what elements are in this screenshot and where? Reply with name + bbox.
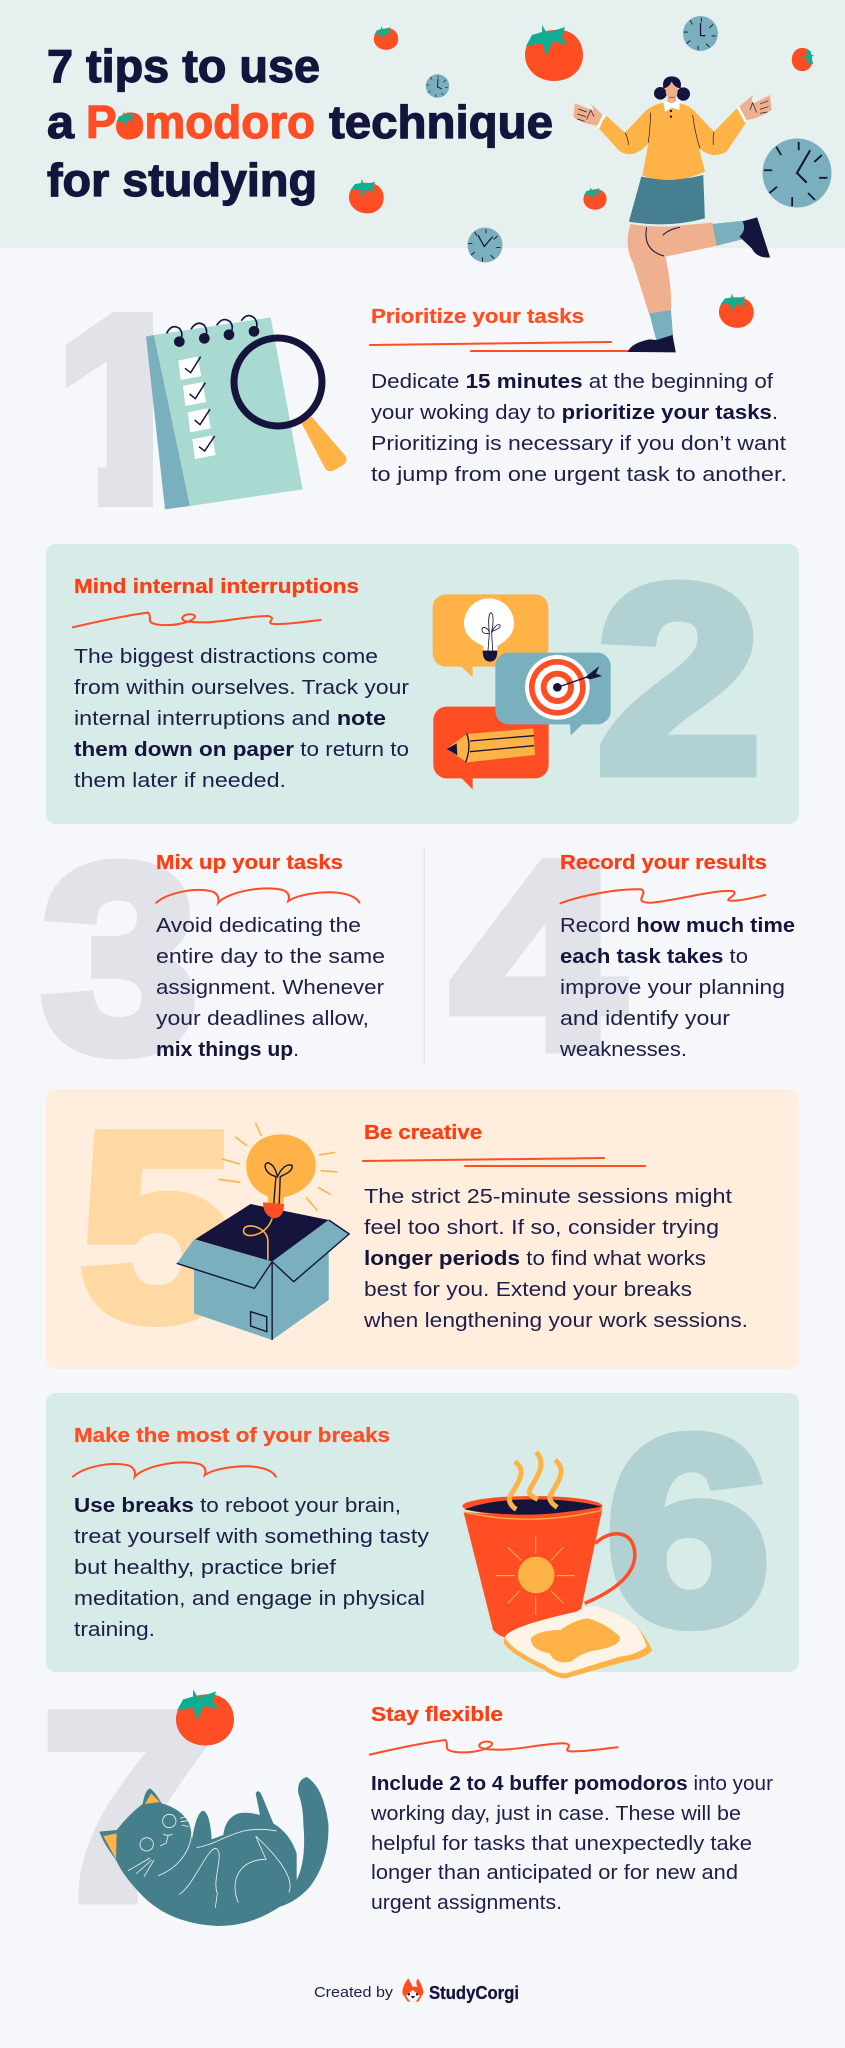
tip 3 text: Avoid dedicating the xyxy=(156,914,361,937)
tip 1 underline xyxy=(370,342,630,351)
tip 6 scribble xyxy=(73,1462,276,1477)
tip 2 heading: Mind internal interruptions xyxy=(74,576,359,598)
icon: clock large xyxy=(762,138,832,208)
tip 4 text: improve your planning xyxy=(560,976,785,999)
tip 2 text: from within ourselves. Track your xyxy=(74,676,409,699)
icon: cat xyxy=(99,1777,328,1926)
icon: mug and toast xyxy=(462,1452,652,1678)
icon: speech bubbles xyxy=(433,594,611,789)
panel: tip 2 xyxy=(46,532,799,828)
tip 6 text: training. xyxy=(74,1618,155,1641)
tip 7 heading: Stay flexible xyxy=(371,1704,503,1726)
tip 3 heading: Mix up your tasks xyxy=(156,852,343,874)
panel: tip 5 xyxy=(46,1079,799,1375)
tip 7 text: helpful for tasks that unexpectedly take xyxy=(371,1832,752,1855)
divider xyxy=(424,847,425,1066)
tip 5 text xyxy=(363,1185,748,1332)
tip 2 text: them down on paper to return to xyxy=(74,738,409,761)
icon: clock top right xyxy=(683,16,718,51)
tip 5 text: when lengthening your work sessions. xyxy=(363,1309,748,1332)
tip 2 text: them later if needed. xyxy=(74,769,286,792)
icon: clock lower xyxy=(468,228,502,262)
icon: notepad with magnifier xyxy=(146,316,347,509)
tip 4 text: and identify your xyxy=(560,1007,730,1030)
header band xyxy=(0,0,845,248)
tip 6 text: but healthy, practice brief xyxy=(74,1556,336,1579)
footer credit: Created by xyxy=(314,1984,394,2001)
tip 3 text: mix things up. xyxy=(156,1038,299,1061)
footer credit xyxy=(314,1978,519,2003)
footer credit: StudyCorgi xyxy=(429,1983,519,2003)
tip 5 heading: Be creative xyxy=(364,1122,482,1144)
tip 2 numeral: 2 xyxy=(597,532,761,828)
icon: tomato on seven xyxy=(176,1690,234,1746)
tip 1 numeral: 1 xyxy=(55,262,193,558)
icon: large tomato xyxy=(525,25,583,81)
tip 1 heading: Prioritize your tasks xyxy=(371,306,584,328)
tip 4 text: weaknesses. xyxy=(559,1038,687,1061)
title: 7 tips to use xyxy=(47,40,320,92)
tip 5 numeral: 5 xyxy=(80,1079,236,1375)
tip 1 text: Dedicate 15 minutes at the beginning of xyxy=(371,370,773,393)
tip 4 text: Record how much time xyxy=(560,914,795,937)
icon: tomato center xyxy=(583,187,607,210)
woman lower body xyxy=(628,175,770,352)
woman upper body xyxy=(573,76,772,180)
tip 1 text: your woking day to prioritize your tasks . xyxy=(371,401,778,424)
tip 7 text xyxy=(370,1772,773,1914)
tip 1 text: to jump from one urgent task to another. xyxy=(371,463,787,486)
icon: small tomato top xyxy=(374,26,398,50)
panel: tip 6 xyxy=(46,1383,799,1679)
title: a xyxy=(47,96,74,148)
tip 6 text xyxy=(74,1494,430,1641)
tip 6 text: Use breaks to reboot your brain, xyxy=(74,1494,401,1517)
tip 5 text: feel too short. If so, consider trying xyxy=(364,1216,719,1239)
tip 7 text: urgent assignments. xyxy=(371,1891,562,1914)
title: Pomodoro xyxy=(86,96,315,148)
icon: tomato right edge xyxy=(791,48,815,71)
tip 5 text: longer periods to find what works xyxy=(364,1247,706,1270)
tip 4 numeral: 4 xyxy=(452,808,625,1104)
tip 7 scribble xyxy=(370,1740,618,1755)
tip 3 text: assignment. Whenever xyxy=(156,976,384,999)
title: technique xyxy=(329,96,553,148)
tip 5 underline xyxy=(363,1158,645,1166)
tip 7 text: longer than anticipated or for new and xyxy=(371,1861,738,1884)
tip 2 text: The biggest distractions come xyxy=(74,645,378,668)
tip 3 text: your deadlines allow, xyxy=(156,1007,369,1030)
tip 3 numeral: 3 xyxy=(42,811,198,1107)
tip 2 text: internal interruptions and note xyxy=(74,707,386,730)
tip 4 text xyxy=(559,914,795,1061)
tip 5 text: The strict 25-minute sessions might xyxy=(364,1185,732,1208)
tip 6 text: treat yourself with something tasty xyxy=(74,1525,430,1548)
tip 4 heading: Record your results xyxy=(560,852,767,874)
tip 4 scribble xyxy=(560,889,765,903)
tip 6 text: meditation, and engage in physical xyxy=(74,1587,425,1610)
tip 7 text: working day, just in case. These will be xyxy=(370,1802,741,1825)
tip 7 text: Include 2 to 4 buffer pomodoros into your xyxy=(371,1772,773,1795)
tip 2 scribble xyxy=(73,613,321,627)
icon: StudyCorgi logo xyxy=(402,1978,423,2002)
tip 3 text: entire day to the same xyxy=(156,945,385,968)
icon: clock small xyxy=(426,74,449,98)
icon: tomato in title xyxy=(116,112,141,140)
tip 6 heading: Make the most of your breaks xyxy=(74,1425,390,1447)
tip 3 text xyxy=(156,914,385,1061)
icon: tomato near title xyxy=(347,177,386,216)
tip 5 text: best for you. Extend your breaks xyxy=(364,1278,692,1301)
tip 7 numeral: 7 xyxy=(42,1659,213,1955)
tip 2 text xyxy=(74,645,409,792)
tip 3 scribble xyxy=(156,888,359,903)
title: for studying xyxy=(47,154,317,206)
tip 4 text: each task takes to xyxy=(560,945,748,968)
icon: box with light bulb xyxy=(177,1123,349,1340)
tip 1 text: Prioritizing is necessary if you don’t want xyxy=(371,432,786,455)
tip 6 numeral: 6 xyxy=(606,1383,770,1679)
tip 1 text xyxy=(371,370,787,486)
icon: tomato by shoe xyxy=(717,292,756,330)
title xyxy=(47,40,553,206)
